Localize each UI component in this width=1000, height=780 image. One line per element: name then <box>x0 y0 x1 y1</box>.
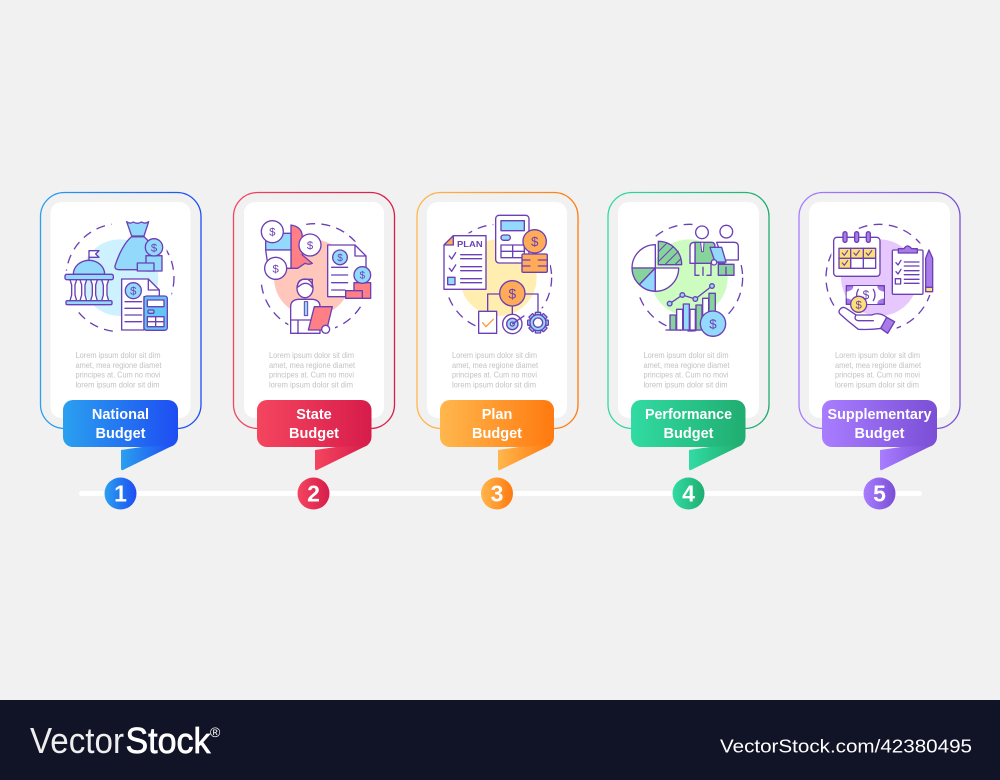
icon: budget chart, official and document: $ <box>337 253 343 264</box>
icon: pie chart, team and bar chart <box>630 223 743 338</box>
step number 3 <box>481 478 513 510</box>
step number 4 <box>672 478 704 510</box>
description text <box>835 350 922 390</box>
step number 4: 4 <box>682 480 695 506</box>
description text: lorem ipsum dolor sit dim <box>835 380 919 390</box>
description text <box>76 350 162 390</box>
label: Performance Budget: Budget <box>664 426 714 442</box>
icon: government building, money bag and document: $ <box>130 286 137 298</box>
description text: amet, mea regione diamet <box>835 360 922 370</box>
label: Performance Budget: Performance <box>645 407 732 423</box>
description text: amet, mea regione diamet <box>452 360 539 370</box>
icon: calendar, checklist and money in hand <box>826 224 937 336</box>
label: Supplementary Budget: Supplementary <box>828 407 932 423</box>
label: Plan Budget <box>440 400 554 470</box>
icon: budget chart, official and document <box>258 218 373 335</box>
icon: government building, money bag and document: $ <box>151 242 158 254</box>
description text: lorem ipsum dolor sit dim <box>269 380 353 390</box>
description text: Lorem ipsum dolor sit dim <box>269 350 354 360</box>
label: State Budget: State <box>296 407 332 423</box>
step number 2 <box>298 478 330 510</box>
icon: budget chart, official and document: $ <box>307 240 314 252</box>
footer bar <box>0 700 1000 780</box>
label: Supplementary Budget: Budget <box>855 426 905 442</box>
description text: Lorem ipsum dolor sit dim <box>76 350 160 360</box>
label: Supplementary Budget <box>822 400 937 470</box>
description text: principes at. Cum no movi <box>835 370 920 380</box>
icon: plan checklist, calculator and goals: $ <box>508 285 516 301</box>
step number 5: 5 <box>873 480 886 506</box>
icon: plan checklist, calculator and goals: $ <box>531 234 539 249</box>
icon: pie chart, team and bar chart: $ <box>709 316 717 331</box>
panel: Plan Budget <box>417 192 578 510</box>
label: Plan Budget: Plan <box>482 407 512 423</box>
step number 3: 3 <box>491 480 503 506</box>
description text: Lorem ipsum dolor sit dim <box>644 350 728 360</box>
description text: lorem ipsum dolor sit dim <box>76 380 160 390</box>
step number 2: 2 <box>307 480 320 506</box>
icon: calendar, checklist and money in hand: $ <box>863 288 870 302</box>
description text: Lorem ipsum dolor sit dim <box>452 350 537 360</box>
panel: Supplementary Budget <box>799 192 960 510</box>
description text: principes at. Cum no movi <box>644 370 729 380</box>
footer logo <box>30 720 211 761</box>
description text: Lorem ipsum dolor sit dim <box>835 350 920 360</box>
description text <box>452 350 539 390</box>
footer logo: Stock <box>126 720 211 761</box>
plan heading: PLAN <box>457 239 483 249</box>
description text: principes at. Cum no movi <box>452 370 537 380</box>
description text: principes at. Cum no movi <box>76 370 161 380</box>
icon: calendar, checklist and money in hand: $ <box>856 299 863 311</box>
label: Plan Budget: Budget <box>472 426 522 442</box>
label: National Budget: National <box>92 407 149 423</box>
icon: budget chart, official and document: $ <box>360 271 366 282</box>
panel: National Budget <box>40 192 201 510</box>
label: State Budget <box>257 400 372 470</box>
icon: budget chart, official and document: $ <box>269 227 276 239</box>
label: Performance Budget <box>631 400 746 470</box>
icon: plan checklist, calculator and goals <box>442 213 552 336</box>
label: National Budget <box>63 400 178 470</box>
description text: lorem ipsum dolor sit dim <box>452 380 536 390</box>
description text: amet, mea regione diamet <box>269 360 356 370</box>
icon: government building, money bag and document <box>61 218 174 333</box>
icon: budget chart, official and document: $ <box>273 263 280 275</box>
label: National Budget: Budget <box>96 426 146 442</box>
description text: amet, mea regione diamet <box>644 360 730 370</box>
step number 5 <box>864 478 896 510</box>
footer logo: Vector <box>30 720 124 761</box>
footer image id: VectorStock.com/42380495 <box>720 736 972 756</box>
description text <box>269 350 356 390</box>
registered mark: ® <box>210 724 221 740</box>
description text <box>644 350 730 390</box>
description text: amet, mea regione diamet <box>76 360 162 370</box>
panel: Performance Budget <box>608 192 769 510</box>
panel: State Budget <box>234 192 394 510</box>
description text: lorem ipsum dolor sit dim <box>644 380 728 390</box>
label: State Budget: Budget <box>289 426 339 442</box>
description text: principes at. Cum no movi <box>269 370 354 380</box>
step number 1 <box>104 478 136 510</box>
step number 1: 1 <box>114 480 127 506</box>
